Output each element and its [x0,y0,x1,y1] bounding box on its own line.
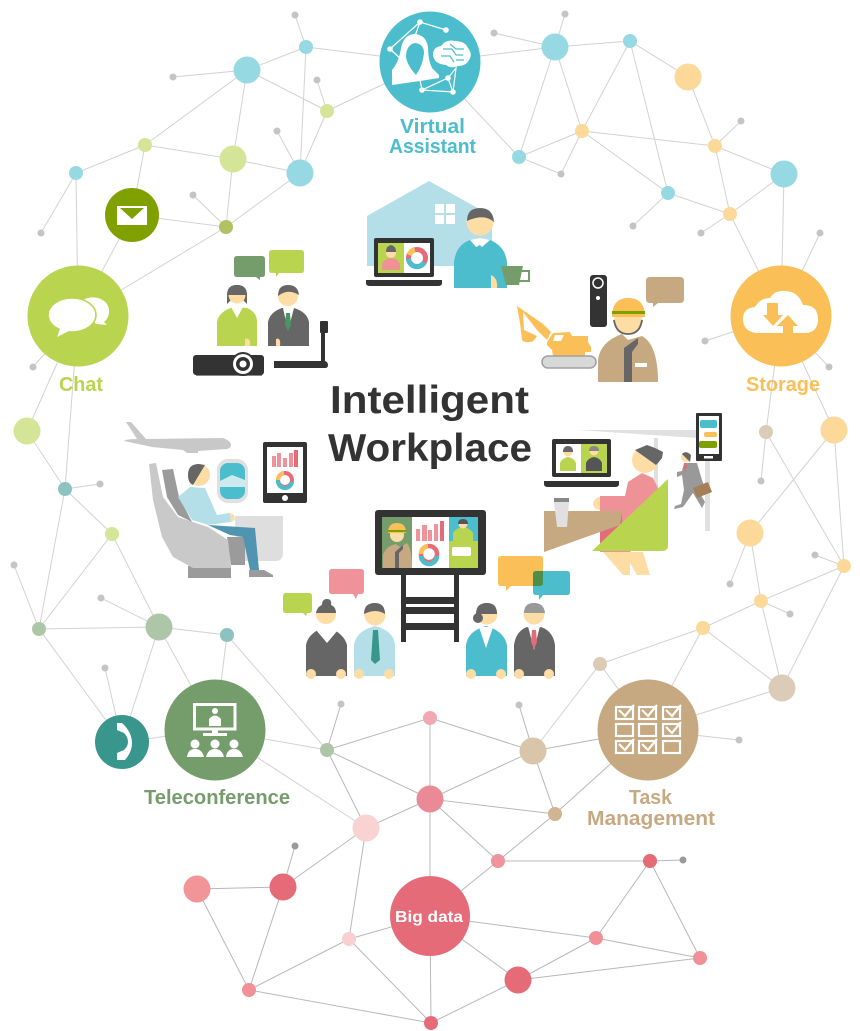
scene: cafe and bus stop [544,413,722,575]
scene: presentation with big screen [283,510,570,679]
hub: Big data: Big data [395,909,463,926]
label: Management: Management [587,808,715,830]
scene: on the airplane [124,422,307,578]
hub: Virtual Assistant [380,12,480,112]
scene: working from home [366,181,529,288]
hub: Storage [730,266,832,366]
hub: Phone [95,715,149,769]
label: Virtual Assistant: Virtual [400,116,465,138]
label: Storage: Storage [746,374,820,396]
label: Teleconference: Teleconference [144,787,290,809]
scene: meeting room with projector [193,250,328,376]
title: Workplace [328,427,532,470]
label: Task: Task [629,787,673,809]
scene: construction site [517,275,684,382]
label: Chat: Chat [59,374,103,396]
title [328,379,532,470]
hub: Chat [28,266,128,366]
hub: Task Management [598,680,698,780]
hub: Big data [390,876,470,956]
title: Intelligent [330,379,529,422]
hub: Teleconference [164,680,266,780]
label: Assistant line: Assistant [389,136,476,158]
hub: Mail [105,188,159,242]
